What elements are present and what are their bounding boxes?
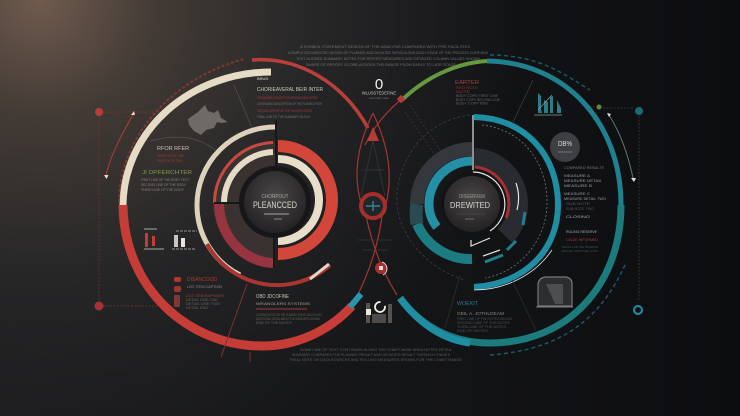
top intro text: TEXT ALIGNED SUMMARY NOTES FOR REPORT MEASURES AND DETAILED COLUMN VALUES SHOWN — [296, 56, 480, 61]
callout lines and nodes — [596, 104, 643, 314]
text: top block: BRUD — [257, 76, 268, 81]
text: red list — [174, 277, 225, 310]
text: right column: MEASURE DETAIL — [564, 179, 602, 183]
text: red list: DISANCOOD — [187, 277, 217, 283]
text: side block: SHORT NOTE ONE — [157, 154, 185, 158]
crossing lines — [352, 98, 403, 306]
text: red list: DETAIL LINE ONE — [186, 298, 218, 302]
outer thin red arc — [252, 60, 368, 128]
top intro text: SHARE OF REPORT SCORE ACROSS THE RANGE FROM EARLY TO LATE STAGE — [306, 62, 456, 67]
top intro text: A SYMBOL STATEMENT DESIGN OF THE ANALYSIS COMPARED WITH PRE FACILITIES — [300, 44, 470, 49]
dark left band — [417, 149, 472, 204]
bottom caption text: SOME LINE OF TEXT CONTINUES ALONG THE CHART BASE AREA NOTES DETAIL — [300, 348, 452, 352]
text: right column: ROLING RESERVE — [566, 229, 597, 234]
text: right column: DETAIL FOR THE LOAD — [562, 249, 599, 253]
text: red heading block: BODY COPY SECOND LINE — [456, 98, 501, 102]
text: side block: SHORT NOTE TWO — [157, 159, 182, 163]
text: red list: LIST ITEM EMPHASIS — [186, 294, 225, 298]
center disk — [441, 173, 503, 235]
text: right column: MEASURE A — [564, 174, 591, 178]
center number callout: 0 — [375, 76, 383, 93]
white thin arcs — [471, 172, 519, 256]
center number callout: summary note — [369, 96, 389, 100]
chart: teal bars — [534, 93, 562, 115]
bottom caption text: FINAL NOTE ON DATA SOURCES AND ROLLING MEASURES SHOWN FOR THE CHART RANGE — [290, 358, 462, 362]
text: right column: SUB NOTE TWO — [566, 207, 594, 211]
center label — [253, 194, 297, 219]
top intro text: A SIMPLE DOCUMENTED DESIGN OF PLANNED AND DEVIATED PATHS ALONG EACH STAGE OF THE PROCESS OVERVIEW — [288, 50, 488, 55]
outer cream ring — [197, 127, 275, 275]
panel: right drewited circle — [397, 55, 643, 355]
center red node — [361, 194, 385, 218]
panel: center connector — [350, 98, 403, 323]
text: red heading block: BODY COPY END — [456, 102, 489, 106]
text: side block: JI DPFERCHTER — [142, 170, 192, 176]
lower left maroon arc — [219, 203, 273, 263]
text: top block: FINAL LINE OF THE SUMMARY BLOCK — [257, 115, 311, 119]
center label — [450, 194, 490, 219]
text: right column: CLOSING — [566, 215, 590, 219]
decorative bottom leaders — [221, 284, 250, 362]
text: right column: MEASURE C — [564, 192, 590, 196]
outer red lower arc — [123, 205, 352, 346]
text: right column — [562, 166, 606, 253]
text: bottom block — [256, 294, 322, 325]
percent badge: DB% — [558, 141, 572, 148]
bottom caption text: SUMMARY COMPARES THE PLANNED RESULT AND DEVIATED RESULT THROUGH STAGES — [292, 353, 450, 357]
text: bottom block: SECOND LINE OF THE NOTES — [457, 321, 511, 325]
white spine — [472, 115, 474, 170]
text: bottom block: END OF NOTES — [457, 329, 489, 333]
outer teal arc — [487, 61, 621, 205]
bottom caption text — [290, 348, 462, 362]
text: red list: LIST ITEM CAPTION — [187, 285, 222, 289]
text: bottom block: GEIL A. JOTHLDEAM — [457, 311, 504, 316]
text: right column: DETAIL FOR THE RESERVE — [562, 245, 598, 249]
center label: DREWITED — [450, 201, 490, 210]
text: red heading block: NOTE — [456, 90, 471, 94]
text: right column: MEASURE B — [564, 184, 593, 188]
text: bottom block: ADDITIONAL DETAIL ABOUT THE MEASURES SHOWN — [256, 317, 320, 321]
red arc — [475, 167, 509, 218]
text: red heading block: BODY COPY FIRST LINE — [456, 94, 499, 98]
teal lower dashes — [485, 212, 525, 262]
text: top block — [257, 76, 323, 119]
text: side block: RFOR RFER — [157, 146, 189, 152]
text: bottom block: END OF THE NOTES — [256, 321, 293, 325]
upper left red arc — [214, 142, 273, 203]
upper left cream arc — [224, 152, 273, 203]
dark brown left backplate — [213, 141, 275, 265]
right cream band — [278, 159, 319, 241]
text: bottom block: FIRST LINE OF THE NOTES BELOW — [457, 317, 513, 321]
panel: left planned circle — [94, 59, 368, 362]
right red band — [278, 146, 332, 254]
center disk — [239, 166, 311, 238]
text: side block: THIRD LINE OF THE BODY — [141, 188, 185, 192]
teal dashes outer — [490, 55, 625, 355]
percent badge — [550, 132, 580, 162]
leader lines — [445, 275, 536, 330]
center number callout: WLUSSTEDEFINE — [362, 90, 396, 96]
right dark band — [474, 158, 518, 236]
text: bottom block: THIRD LINE OF THE NOTES — [457, 325, 507, 329]
text: red heading block: RED NOTE — [456, 86, 479, 90]
text: bottom block: OBD JDCOFINE — [256, 294, 290, 300]
top intro text — [288, 44, 488, 67]
upper left teal ring — [429, 161, 472, 227]
icon: power dial with city — [366, 302, 392, 323]
text: red list: DETAIL END — [186, 306, 209, 310]
outer green arc — [402, 61, 487, 100]
text: top block: CONTINUING DESCRIPTION OF THE PLANNED PATH — [257, 102, 322, 106]
lower left teal band — [417, 224, 472, 259]
text: red heading block — [455, 80, 501, 106]
text: bottom block — [457, 301, 513, 333]
text: red heading block: EARTER — [455, 80, 479, 86]
center label: CHORPOUT — [262, 194, 289, 200]
center number callout — [362, 76, 396, 100]
text: bottom block: WRANGLERS SYSTEMS — [256, 301, 310, 306]
decorative leader line — [513, 80, 533, 122]
text: side block — [141, 146, 192, 192]
text: right column: LOLDE INFORMED — [566, 237, 598, 242]
dashed left arcs — [397, 115, 470, 280]
text: side block: FIRST LINE OF THE BODY TEXT — [141, 178, 190, 182]
donut rings — [197, 120, 332, 285]
icon: machine outline — [536, 277, 573, 307]
outer red ring — [207, 244, 330, 285]
text: right column: COMPARED RESULTS — [564, 166, 604, 170]
text: top block: ORGANIZED STAGE FOR REVIEW AND NOTES — [257, 96, 319, 100]
text: bottom block: CLOSING NOTES ON THE PLANNED ROUTE AND STAGES — [256, 313, 322, 317]
lower red node — [375, 262, 387, 275]
center label: DISEERVEM — [459, 194, 485, 200]
decorative leader lines — [150, 85, 252, 150]
callout lines and nodes — [94, 108, 160, 310]
outer cream arc — [123, 72, 271, 205]
text: right column: MEASURE DETAIL TWO — [564, 197, 606, 201]
text: red list: DETAIL LINE TWO — [186, 302, 221, 306]
text: top block: SECOND GROUP OF THE REVIEW NOTES — [257, 109, 313, 113]
teal and red junction — [350, 294, 361, 307]
red spire triangle — [367, 127, 379, 141]
middle teal arc — [474, 117, 558, 287]
text: right column: SUB NOTE — [566, 202, 591, 206]
icon: map silhouette — [188, 105, 228, 135]
donut rings — [416, 115, 525, 262]
divider slits — [214, 120, 276, 268]
center label: PLEANCCED — [253, 200, 297, 210]
chart: small bars — [144, 229, 197, 249]
text: side block: SECOND LINE OF THE BODY — [141, 183, 187, 187]
text: top block: CHORIEAVERAL BEIR INTER — [257, 87, 323, 93]
text: bottom block: WOEKIT — [457, 301, 478, 307]
